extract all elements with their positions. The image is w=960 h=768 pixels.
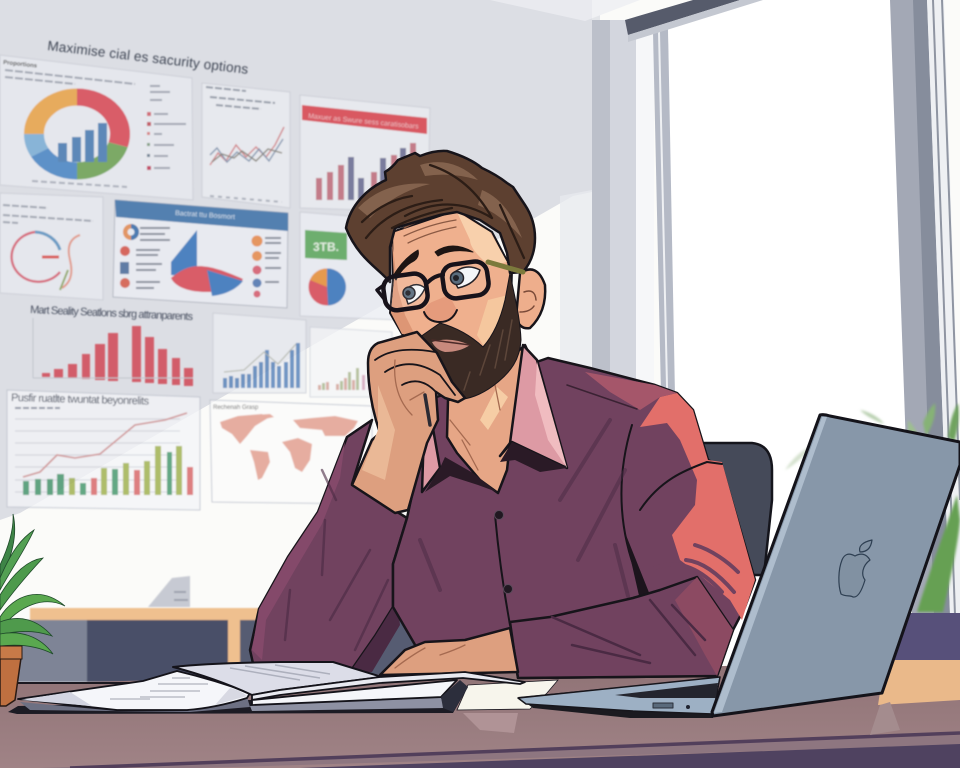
collar bbox=[422, 345, 567, 492]
torso and right arm bbox=[393, 358, 755, 678]
beard and moustache bbox=[420, 273, 521, 399]
panel: red header bar chart bbox=[300, 95, 430, 212]
sleeve folds bbox=[655, 545, 738, 592]
laptop lid bbox=[712, 415, 960, 716]
panel: blue bar chart bbox=[213, 313, 306, 393]
wall charts bbox=[0, 38, 430, 607]
background shelf bbox=[12, 608, 420, 682]
chair bbox=[700, 443, 772, 575]
right eye bbox=[450, 267, 480, 288]
nose bbox=[423, 295, 457, 322]
left arm sleeve bbox=[250, 420, 407, 672]
panel: line chart bbox=[202, 83, 290, 208]
wall title: Maximise cial es sacurity options bbox=[47, 38, 249, 77]
laptop bbox=[518, 415, 960, 718]
panel: world map: Rechenah Grasp bbox=[213, 405, 259, 411]
spine bbox=[441, 680, 468, 712]
folder base bbox=[8, 687, 468, 714]
man bbox=[250, 151, 755, 678]
shoulder highlight bbox=[640, 393, 755, 620]
window and frame bbox=[490, 0, 960, 660]
paper on desk bbox=[457, 680, 558, 710]
lower pages bbox=[250, 698, 445, 711]
middle pages bbox=[252, 680, 457, 705]
right back page bbox=[173, 662, 382, 695]
laptop base bbox=[518, 677, 720, 718]
left plant and pot bbox=[0, 514, 65, 706]
panel: donut chart: Proportions bbox=[3, 60, 38, 70]
hand on desk bbox=[380, 628, 518, 675]
icon: apple logo bbox=[839, 540, 872, 597]
forearm bbox=[510, 577, 733, 678]
panel: blue dashboard with pie bbox=[113, 200, 288, 308]
left lower pages bbox=[20, 697, 250, 712]
glasses bbox=[377, 260, 523, 312]
panel: green stat and small pie bbox=[300, 212, 400, 320]
panel: small coloured bar chart bbox=[310, 327, 392, 397]
upper cover bbox=[252, 672, 525, 700]
panel: growth chart bbox=[7, 390, 200, 510]
eyebrows bbox=[393, 246, 473, 280]
panel: donut chart bbox=[0, 55, 193, 200]
left eye bbox=[403, 285, 425, 304]
buttons bbox=[494, 510, 504, 520]
neck and chest skin bbox=[447, 345, 535, 493]
panel: growth chart: Pusfir ruatlte twuntat beyonrelits bbox=[11, 392, 150, 408]
hand at chin bbox=[352, 332, 465, 513]
open folder with documents bbox=[8, 662, 525, 714]
shade over upper wall bbox=[0, 0, 592, 520]
face bbox=[390, 210, 512, 395]
panel: gauge bbox=[0, 193, 103, 300]
right plant and pot bbox=[785, 403, 960, 661]
ear bbox=[516, 269, 545, 328]
panel: red header bar chart: Maxuer as Swure sess caratisobars bbox=[308, 113, 419, 131]
hair bbox=[346, 151, 535, 282]
chest folds bbox=[495, 515, 510, 625]
shelf items bbox=[148, 576, 190, 607]
panel: red bar chart: Mart Seality Seatlons sbrg attranparents bbox=[30, 304, 194, 323]
panel: green stat and small pie: 3TB. bbox=[313, 240, 339, 254]
left page bbox=[18, 671, 250, 710]
desk bbox=[0, 660, 960, 768]
panel: world map bbox=[210, 400, 372, 504]
panel: blue dashboard with pie: Bactrat ttu Bosmort bbox=[175, 210, 235, 221]
panel: red bar chart bbox=[30, 304, 194, 386]
